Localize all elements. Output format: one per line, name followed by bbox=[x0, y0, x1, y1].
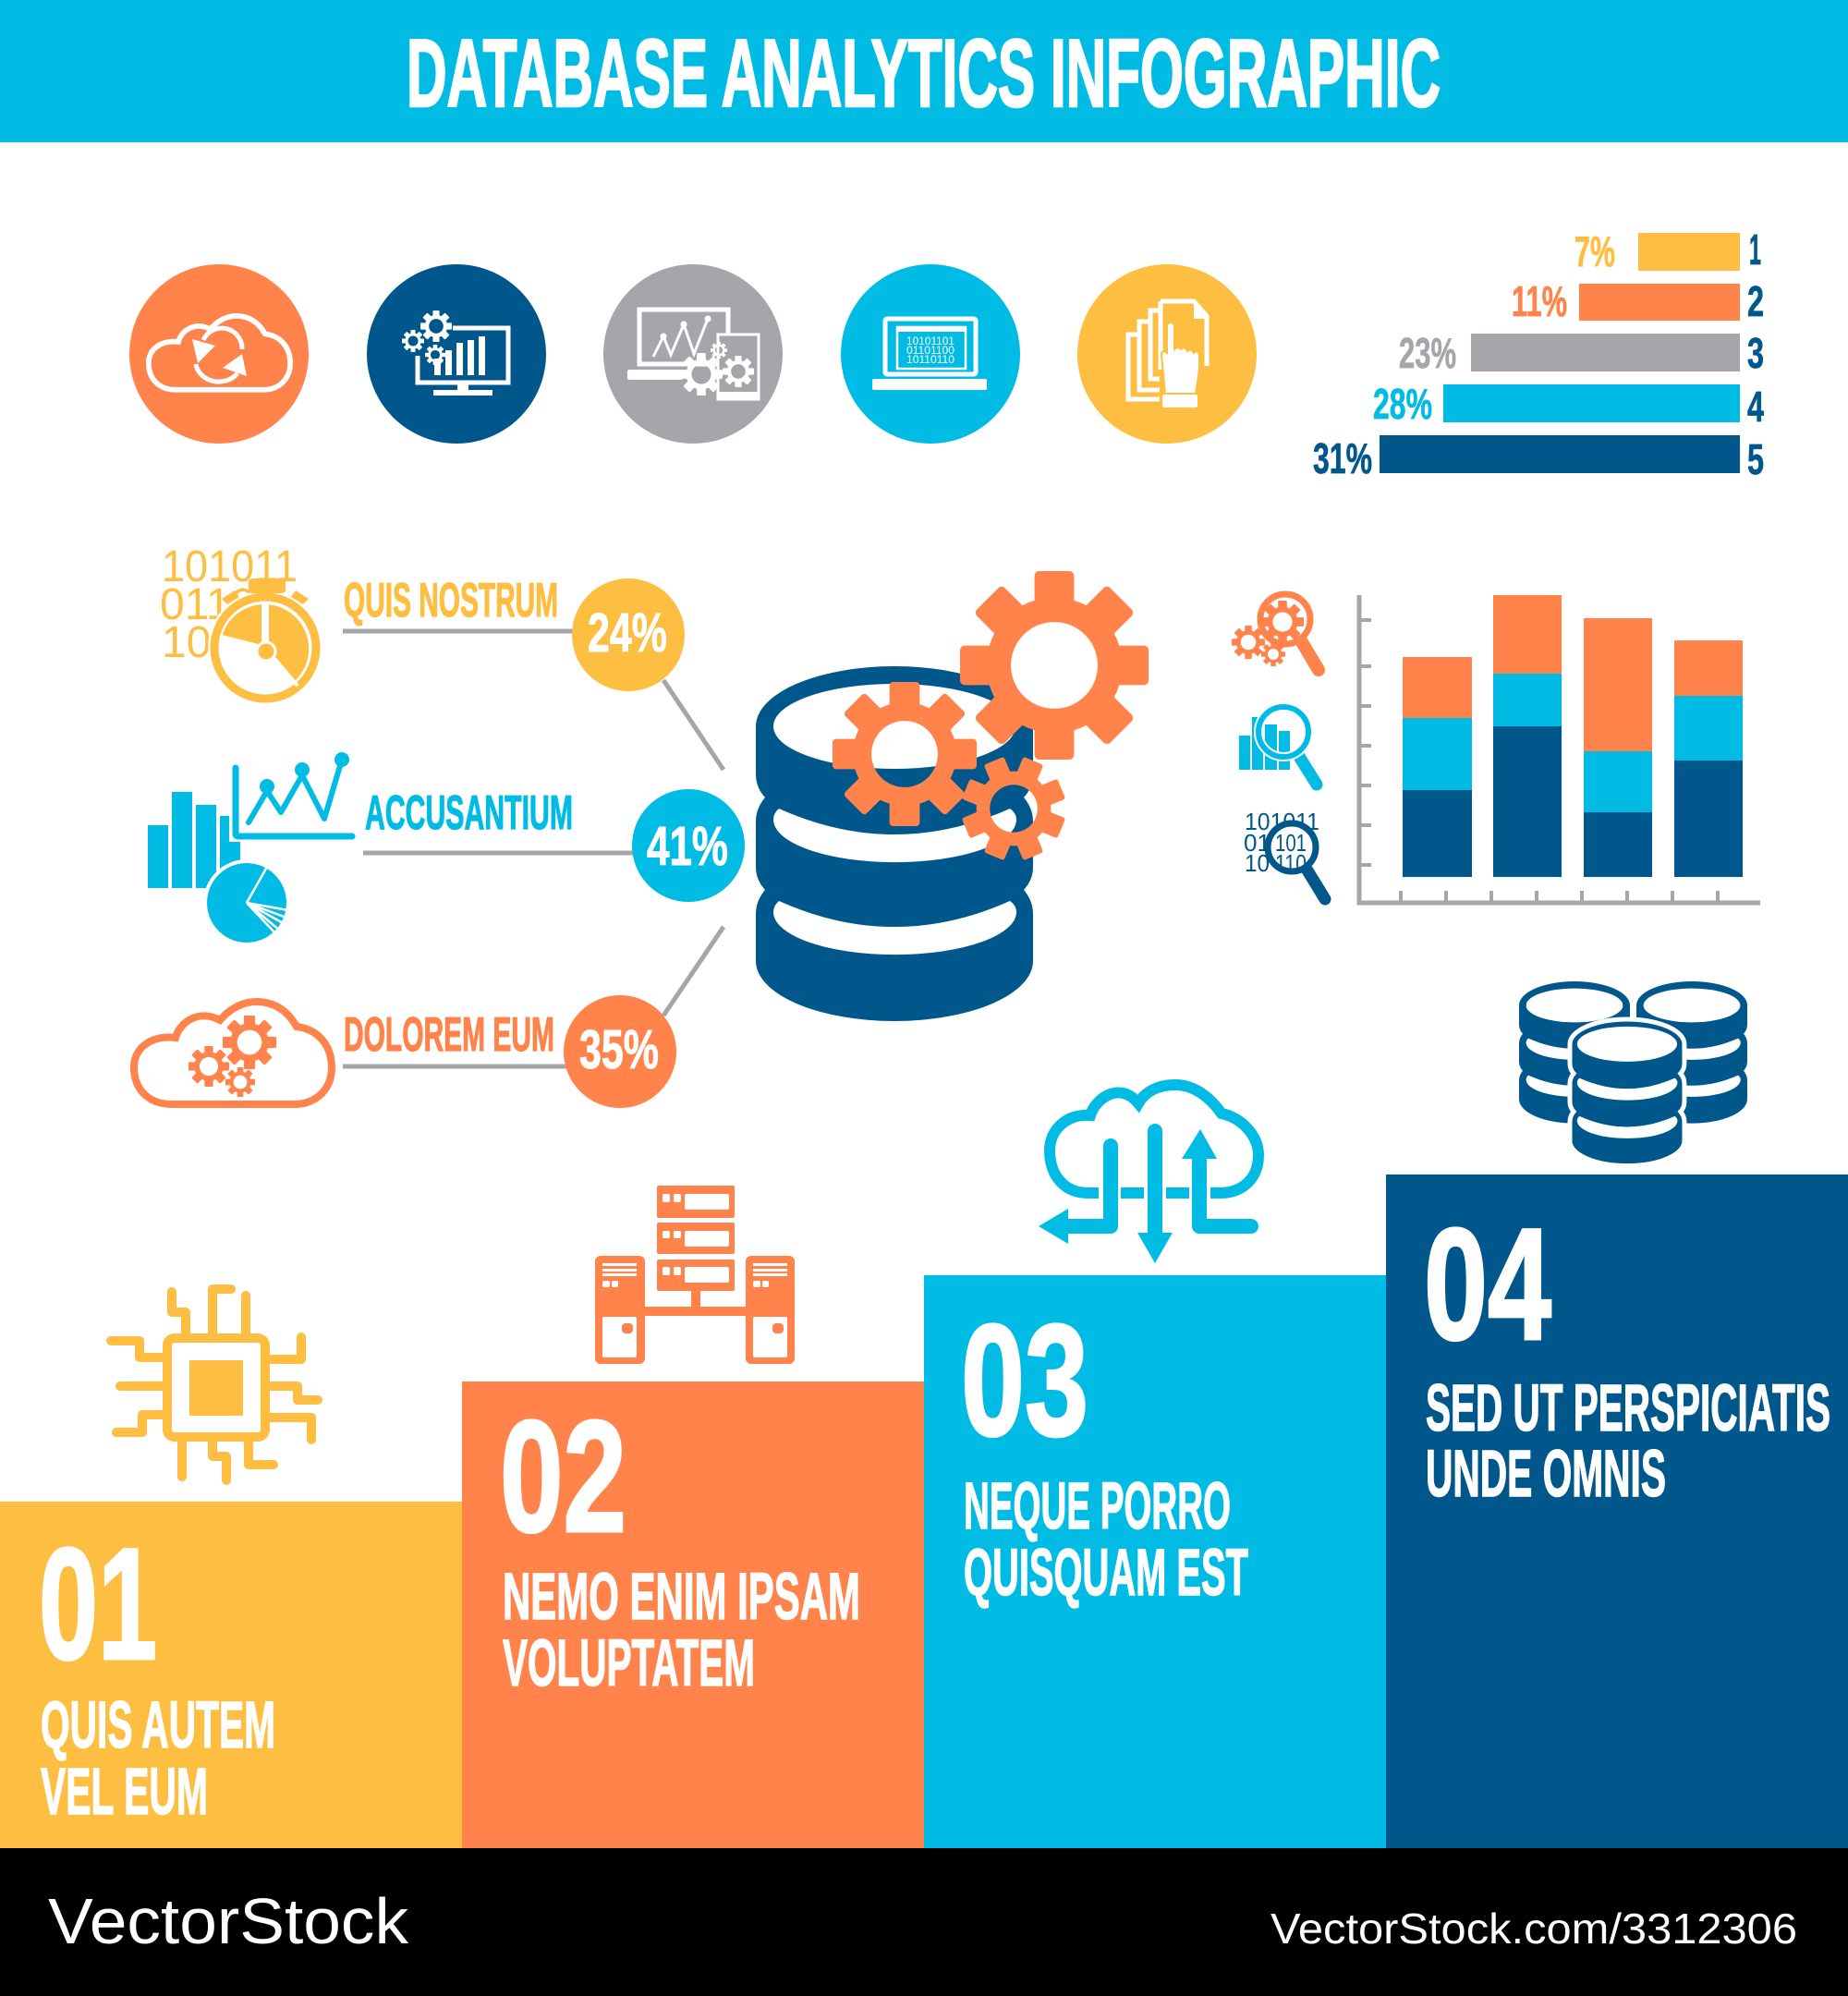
icon: magnifier with gears bbox=[1232, 594, 1319, 670]
step text 03 bbox=[964, 1470, 1248, 1610]
bar 3: 23%: 23% bbox=[1399, 329, 1456, 377]
icon: laptop binary circle bbox=[841, 264, 1020, 444]
icon: devices with gears circle bbox=[603, 264, 783, 444]
icon: magnifier with binary: 10 bbox=[1245, 849, 1270, 877]
bar 2: 11% bbox=[1512, 277, 1764, 325]
bar 5: 31% bbox=[1313, 434, 1764, 483]
icon: charts group bbox=[148, 752, 352, 946]
footer url: VectorStock.com/3312306 bbox=[1270, 1905, 1797, 1953]
step number 03: 03 bbox=[961, 1292, 1088, 1469]
step number 02: 02 bbox=[500, 1388, 626, 1565]
icon: stopwatch with binary bbox=[160, 542, 322, 705]
icon: laptop binary circle: 10110110 bbox=[906, 353, 954, 366]
icon: magnifier with binary: 01 bbox=[1244, 829, 1270, 857]
icon: magnifier with binary bbox=[1244, 808, 1325, 899]
icon: cloud sync circle bbox=[129, 264, 309, 444]
bar 1: 7%: 7% bbox=[1574, 227, 1615, 275]
step text 01 bbox=[41, 1689, 275, 1829]
icon: magnifier with binary: 110 bbox=[1275, 849, 1307, 877]
icon: central database with gears bbox=[756, 571, 1149, 1021]
step text 03: QUISQUAM EST bbox=[964, 1537, 1248, 1610]
footer band bbox=[0, 1848, 1848, 1996]
label: quis nostrum: QUIS NOSTRUM bbox=[344, 574, 558, 627]
step text 02: NEMO ENIM IPSAM bbox=[503, 1561, 860, 1634]
header banner bbox=[0, 0, 1848, 142]
bar 2: 11%: 2 bbox=[1747, 277, 1764, 325]
bar 3: 23% bbox=[1399, 329, 1764, 377]
step text 02: VOLUPTATEM bbox=[503, 1627, 755, 1700]
label: dolorem eum: DOLOREM EUM bbox=[344, 1008, 554, 1062]
icon: documents and hand circle bbox=[1077, 264, 1257, 444]
stack 1 bbox=[1403, 657, 1472, 877]
step text 01: VEL EUM bbox=[41, 1756, 208, 1829]
badge: 41% bbox=[632, 789, 745, 902]
step text 04 bbox=[1426, 1372, 1830, 1511]
icon: magnifier with binary: 101011 bbox=[1245, 808, 1319, 835]
step number 04: 04 bbox=[1424, 1196, 1551, 1373]
step text 03: NEQUE PORRO bbox=[964, 1470, 1231, 1543]
icon: stopwatch with binary: 0110 bbox=[160, 580, 255, 629]
step text 01: QUIS AUTEM bbox=[41, 1689, 275, 1762]
stack 3 bbox=[1584, 618, 1652, 877]
connector lines bbox=[343, 631, 723, 1066]
stack 2 bbox=[1493, 595, 1562, 877]
icon: monitor with gears circle bbox=[367, 264, 546, 444]
icon: database trio bbox=[1519, 981, 1747, 1166]
badge: 24%: 24% bbox=[588, 602, 667, 663]
label: accusantium: ACCUSANTIUM bbox=[365, 786, 573, 840]
icon: cloud with data arrows bbox=[1039, 1085, 1258, 1263]
step text 02 bbox=[503, 1561, 860, 1700]
badge: 24% bbox=[572, 578, 685, 691]
icon: stopwatch with binary: 10 bbox=[162, 618, 211, 667]
stacked bar chart bbox=[1359, 595, 1760, 903]
icon: magnifier with binary: 101 bbox=[1275, 829, 1307, 857]
bar 4: 28%: 4 bbox=[1747, 383, 1764, 431]
bar 5: 31%: 31% bbox=[1313, 434, 1372, 482]
icon: cloud with gears bbox=[134, 1002, 332, 1104]
badge: 41%: 41% bbox=[647, 816, 728, 877]
bar 4: 28%: 28% bbox=[1373, 380, 1432, 428]
step text 04: UNDE OMNIS bbox=[1426, 1438, 1666, 1511]
bar 5: 31%: 5 bbox=[1747, 435, 1764, 483]
panel: step 03 bbox=[924, 1275, 1386, 1848]
stack 4 bbox=[1674, 640, 1743, 877]
footer brand: VectorStock bbox=[48, 1885, 409, 1957]
bar 1: 7% bbox=[1574, 225, 1761, 275]
panel: step 01 bbox=[0, 1502, 462, 1848]
bar 2: 11%: 11% bbox=[1512, 277, 1567, 325]
panel: step 04 bbox=[1386, 1174, 1848, 1848]
icon: laptop binary circle: 01101100 bbox=[906, 344, 954, 357]
badge: 35%: 35% bbox=[579, 1019, 659, 1080]
panel: step 02 bbox=[462, 1381, 924, 1848]
icon: magnifier with bars bbox=[1239, 707, 1317, 785]
badge: 35% bbox=[564, 995, 676, 1108]
icon: stopwatch with binary: 101011 bbox=[162, 542, 298, 591]
icon: chip bbox=[111, 1289, 318, 1480]
bar 1: 7%: 1 bbox=[1749, 225, 1761, 274]
bar 3: 23%: 3 bbox=[1747, 329, 1764, 377]
bar 4: 28% bbox=[1373, 380, 1764, 431]
horizontal bar chart: percentages bbox=[1313, 225, 1764, 483]
step number 01: 01 bbox=[39, 1515, 157, 1693]
icon: laptop binary circle: 10101101 bbox=[906, 335, 954, 347]
icon: servers bbox=[595, 1186, 795, 1364]
